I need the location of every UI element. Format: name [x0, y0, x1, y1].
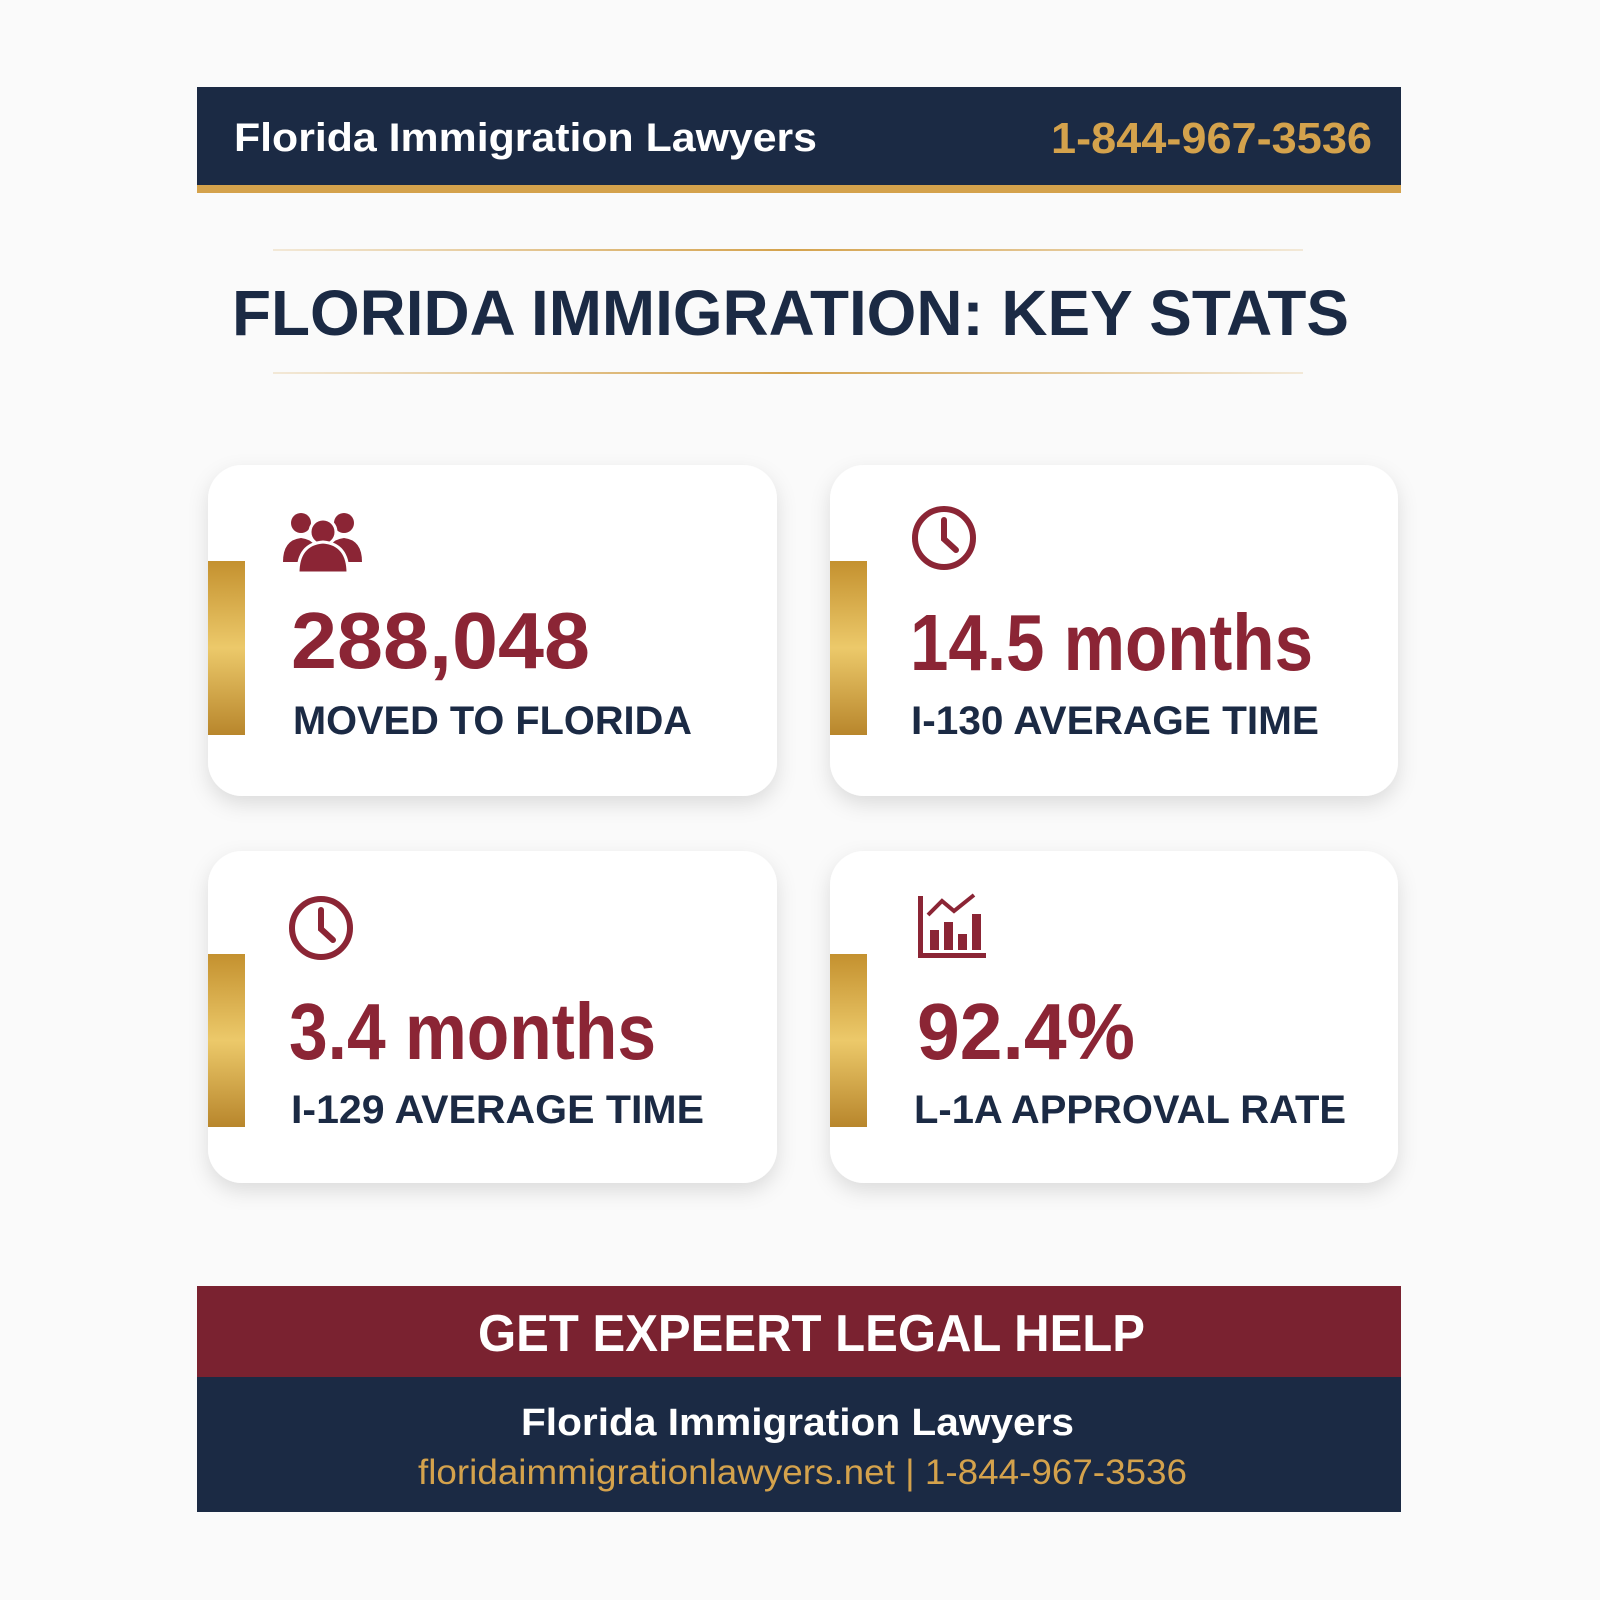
footer contact	[197, 1377, 1401, 1512]
panel: L-1A: 92.4%	[917, 987, 1135, 1076]
icon: chart	[918, 895, 986, 958]
header bar: 1-844-967-3536	[1051, 114, 1372, 163]
icon: people	[283, 513, 362, 573]
icon: clock	[292, 899, 350, 957]
footer contact: floridaimmigrationlawyers.net | 1-844-967-3536	[418, 1453, 1187, 1492]
panel: moved to florida: 288,048	[291, 596, 590, 685]
cta banner: GET EXPEERT LEGAL HELP	[478, 1305, 1145, 1363]
panel: I-130: I-130 AVERAGE TIME	[911, 699, 1319, 743]
panel: I-129: 3.4 months	[289, 987, 656, 1076]
header bar: Florida Immigration Lawyers	[234, 116, 817, 160]
panel: I-130: 14.5 months	[910, 598, 1313, 687]
panel: L-1A	[830, 851, 1398, 1183]
panel: I-130	[830, 465, 1398, 796]
panel: moved to florida: MOVED TO FLORIDA	[293, 699, 692, 743]
icon: clock	[915, 509, 973, 567]
panel: I-129: I-129 AVERAGE TIME	[291, 1088, 704, 1132]
footer contact: Florida Immigration Lawyers	[521, 1402, 1074, 1444]
header bar	[197, 87, 1401, 193]
cta banner	[197, 1286, 1401, 1377]
panel: moved to florida	[208, 465, 777, 796]
panel: I-129	[208, 851, 777, 1183]
panel: L-1A: L-1A APPROVAL RATE	[914, 1088, 1346, 1132]
title: FLORIDA IMMIGRATION: KEY STATS	[232, 277, 1349, 349]
